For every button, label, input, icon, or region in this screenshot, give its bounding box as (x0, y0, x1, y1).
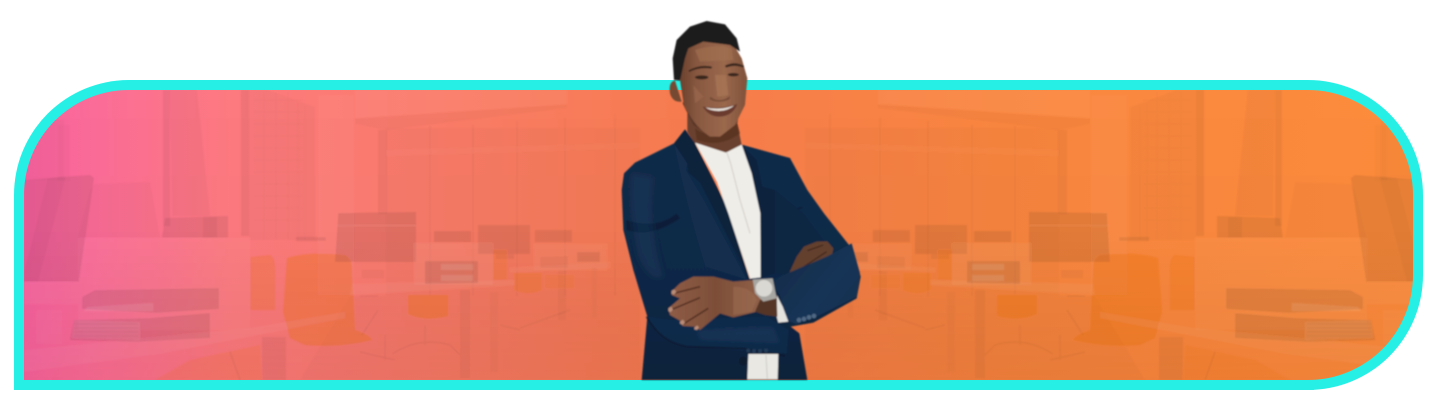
central iMac (335, 212, 416, 278)
front hand (668, 277, 762, 330)
rear orange chairs (408, 250, 574, 319)
jacket (622, 129, 861, 380)
pillar (378, 130, 387, 214)
wrist and watch (753, 278, 777, 317)
bottom border strip (14, 380, 1314, 390)
jacket highlights (630, 173, 780, 343)
vertical shading (24, 284, 1412, 380)
rear hand (788, 241, 833, 275)
rear chair (250, 255, 275, 310)
chair bases (424, 342, 1021, 343)
mug (36, 310, 62, 344)
wooden wall panels (386, 114, 640, 296)
small rear monitor (162, 216, 228, 238)
binders stack (70, 288, 219, 342)
neck shadow (695, 123, 740, 143)
floor (300, 296, 640, 380)
face modelling (683, 46, 733, 137)
eyebrows and eyes (688, 63, 744, 79)
panel: rounded banner border (14, 80, 1423, 390)
shirt (695, 143, 778, 379)
central partitions (414, 243, 607, 285)
central binders (425, 252, 600, 284)
central desks (350, 262, 610, 378)
panel: gradient office background (24, 90, 1421, 380)
white desk partition (78, 238, 250, 330)
sleeve buttons (739, 314, 816, 365)
front sleeve (770, 243, 860, 324)
foreground desk (24, 312, 345, 380)
column between windows (318, 95, 354, 295)
ear (670, 81, 682, 102)
rear small monitors (296, 225, 572, 259)
office scene: left half (24, 90, 640, 380)
jacket shading (626, 129, 830, 356)
face (680, 38, 747, 137)
translucent second monitor (78, 182, 160, 238)
neck (687, 107, 742, 154)
shirt cuff (777, 295, 788, 323)
smile (703, 104, 737, 117)
hair (673, 21, 740, 81)
foreground orange chair (283, 254, 395, 360)
ceiling panel (355, 90, 567, 130)
left foreground monitor (24, 175, 94, 304)
businessman (622, 21, 861, 380)
office scene: mirrored right half (805, 90, 1421, 380)
window frames and skyline (24, 90, 315, 240)
